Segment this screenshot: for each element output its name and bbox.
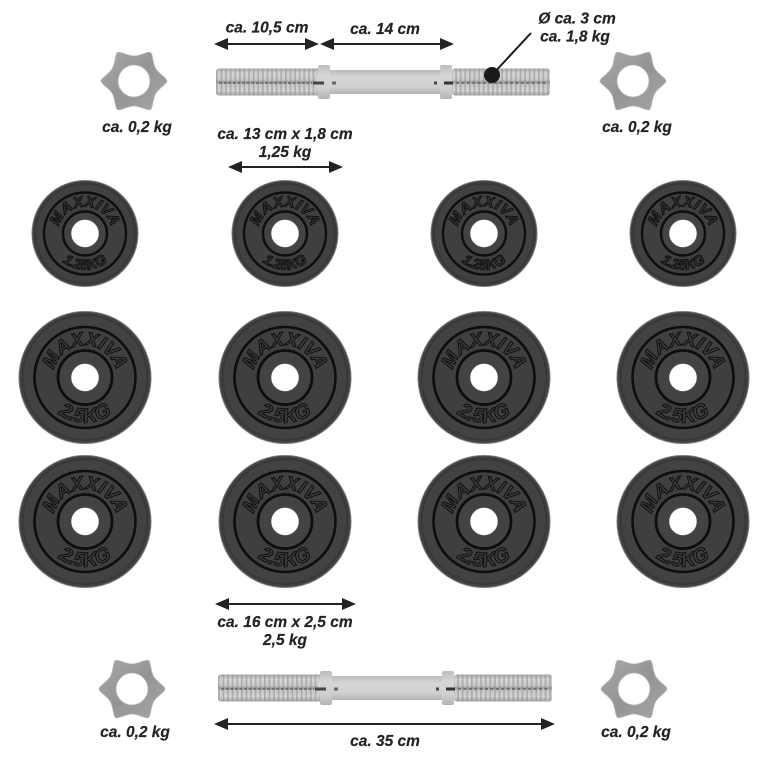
plate 2,5 kg, row 3 column 2	[218, 455, 352, 588]
marker dot and leader line	[484, 33, 531, 83]
label: nut weight left top: ca. 0,2 kg	[102, 119, 172, 136]
spin-lock nut bottom left	[99, 660, 165, 718]
plate 2,5 kg, row 2 column 2: 2.5KG	[257, 403, 310, 424]
plate 1,25 kg, column 2: 1.25KG	[262, 254, 306, 270]
arrow: 10,5 cm	[214, 38, 319, 50]
plate 1,25 kg, column 2: MAXXIVA	[250, 195, 320, 227]
label: total length: ca. 35 cm	[350, 733, 420, 750]
plate 1,25 kg, column 2	[232, 180, 338, 287]
spin-lock nut top left	[101, 52, 167, 110]
plate 1,25 kg, column 3	[430, 180, 538, 287]
label: large plate size	[217, 614, 353, 649]
label: bar diameter and weight: Ø ca. 3 cm	[538, 10, 616, 28]
label: small plate size: ca. 13 cm x 1,8 cm	[217, 126, 353, 143]
spin-lock nut bottom right	[601, 660, 667, 718]
top dumbbell bar	[216, 33, 550, 99]
plate 1,25 kg, column 3: MAXXIVA	[448, 195, 519, 227]
plate 2,5 kg, row 2 column 1: 2.5KG	[57, 403, 110, 424]
plate 2,5 kg, row 2 column 3: MAXXIVA	[441, 331, 526, 370]
plate 2,5 kg, row 3 column 4: 2.5KG	[655, 547, 708, 568]
plate 2,5 kg, row 3 column 2: 2.5KG	[257, 547, 310, 568]
label: large plate size: ca. 16 cm x 2,5 cm	[217, 614, 353, 631]
spin-lock nut top right	[600, 52, 666, 110]
plate 2,5 kg, row 3 column 3: MAXXIVA	[441, 475, 526, 514]
plate 1,25 kg, column 3: 1.25KG	[461, 254, 506, 270]
label: length 14 cm: ca. 14 cm	[350, 21, 420, 38]
plate 2,5 kg, row 3 column 1	[18, 455, 152, 588]
plate 2,5 kg, row 2 column 1	[18, 311, 152, 444]
label: nut weight left bottom: ca. 0,2 kg	[100, 724, 170, 741]
plate 2,5 kg, row 3 column 3	[418, 455, 550, 588]
plate 2,5 kg, row 3 column 4	[616, 455, 750, 588]
plate 2,5 kg, row 3 column 4: MAXXIVA	[640, 475, 726, 514]
plate 2,5 kg, row 2 column 4	[616, 311, 750, 444]
plate 2,5 kg, row 3 column 1: MAXXIVA	[42, 475, 128, 514]
arrow: 14 cm	[320, 38, 454, 50]
label: small plate size: 1,25 kg	[259, 144, 312, 161]
label: bar diameter and weight: ca. 1,8 kg	[540, 28, 610, 46]
plate 1,25 kg, column 4	[630, 180, 736, 287]
plate 1,25 kg, column 4: 1.25KG	[660, 254, 704, 270]
plate 1,25 kg, column 4: MAXXIVA	[648, 195, 718, 227]
plate 2,5 kg, row 2 column 2: MAXXIVA	[242, 331, 328, 370]
plate 2,5 kg, row 3 column 1: 2.5KG	[57, 547, 110, 568]
plate 2,5 kg, row 3 column 3: 2.5KG	[456, 547, 510, 568]
plate 2,5 kg, row 2 column 3	[418, 311, 550, 444]
plate 2,5 kg, row 2 column 4: MAXXIVA	[640, 331, 726, 370]
plate 1,25 kg, column 1: MAXXIVA	[50, 195, 120, 227]
label: small plate size	[217, 126, 353, 161]
plate 2,5 kg, row 2 column 4: 2.5KG	[655, 403, 708, 424]
arrow: small plate width	[228, 161, 343, 173]
plate 1,25 kg, column 1	[32, 180, 138, 287]
label: large plate size: 2,5 kg	[262, 632, 307, 649]
arrow: large plate width	[215, 598, 356, 610]
bottom dumbbell bar	[218, 671, 552, 705]
label: length 10,5 cm: ca. 10,5 cm	[226, 20, 309, 36]
label: nut weight right bottom: ca. 0,2 kg	[601, 724, 671, 741]
plate 1,25 kg, column 1: 1.25KG	[62, 254, 106, 270]
arrow: total length 35 cm	[214, 718, 555, 730]
label: nut weight right top: ca. 0,2 kg	[602, 119, 672, 136]
label: bar diameter and weight	[538, 10, 616, 46]
plate 2,5 kg, row 2 column 1: MAXXIVA	[42, 331, 128, 370]
plate 2,5 kg, row 3 column 2: MAXXIVA	[242, 475, 328, 514]
plate 2,5 kg, row 2 column 2	[218, 311, 352, 444]
plate 2,5 kg, row 2 column 3: 2.5KG	[456, 403, 510, 424]
